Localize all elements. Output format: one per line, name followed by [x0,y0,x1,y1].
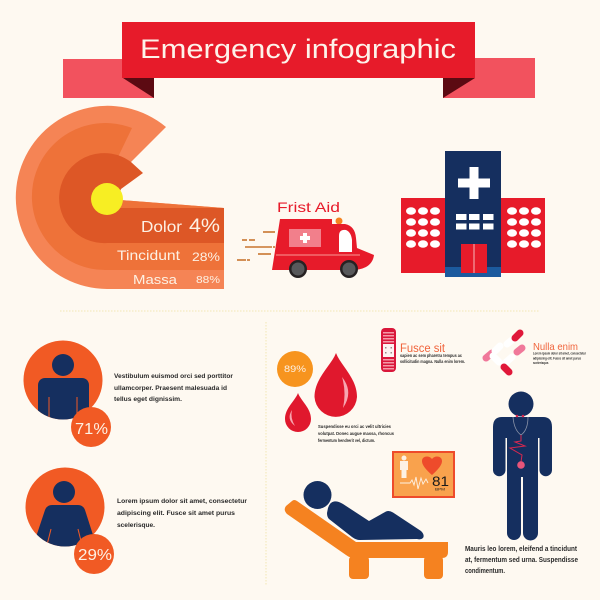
badge: 89%: 89% [284,364,307,375]
text block: Fusce sit: Fusce sit [400,343,446,355]
text block: Fusce sit [400,343,465,364]
icon: heart rate monitor: 81 [432,473,449,489]
concentric wedge chart: 28% [192,250,220,264]
icon: standing figure with stethoscope [493,392,552,541]
icon: heart rate monitor [393,452,454,497]
concentric wedge chart: Tincidunt [117,247,180,263]
text block: person 71%: tellus eget dignissim. [114,396,182,403]
text block: drops [318,424,394,444]
text block: Nulla enim: Lorem ipsum dolor sit amet, consectetur [533,352,587,356]
text block: person 29%: adipiscing elit. Fusce sit amet purus [117,510,235,517]
text block: person 71%: Vestibulum euismod orci sed porttitor [114,373,233,380]
badge: 89% [277,351,313,387]
text block: person 29%: Lorem ipsum dolor sit amet, consectetur [117,498,247,505]
concentric wedge chart: 88% [196,274,220,286]
icon: ambulance [237,218,374,278]
concentric wedge chart: Dolor [141,219,183,236]
text block: person 29% [117,498,247,529]
title: Emergency infographic [140,34,456,64]
icon: pills [486,333,522,372]
text block: Nulla enim: scelerisque. [533,361,549,365]
icon: patient on lounge [285,481,448,579]
text block: figure: at, fermentum sed urna. Suspendisse [465,557,578,564]
text block: figure: condimentum. [465,568,505,575]
icon: bandage [381,328,396,372]
panel: person stat 29%: 29% [78,547,112,564]
icon: blood drops [285,353,357,432]
concentric wedge chart: Massa [133,273,177,287]
ambulance label: Frist Aid [277,199,340,215]
panel: person stat 29% [26,468,114,574]
panel: person stat 71% [24,340,111,447]
text block: drops: volutpat. Donec augue massa, rhoncus [318,431,394,437]
title banner [63,22,535,98]
panel: person stat 71%: 71% [75,421,108,438]
text block: Nulla enim: Nulla enim [533,341,578,353]
text block: person 71% [114,373,233,403]
text block: figure: Mauris leo lorem, eleifend a tincidunt [465,546,578,553]
text block: person 71%: ullamcorper. Praesent malesuada id [114,385,227,392]
text block: Nulla enim: adipiscing elit. Fusce sit amet purus [533,356,581,360]
text block: Fusce sit: sollicitudin magna. Nulla enim lorem. [400,359,465,364]
icon: hospital [401,151,545,277]
text block: person 29%: scelerisque. [117,522,155,529]
concentric wedge chart [16,106,224,289]
text block: figure [465,546,578,575]
text block: drops: fermentum hendrerit vel, dictum. [318,438,375,444]
icon: heart rate monitor: BPM [435,488,445,492]
text block: Nulla enim [533,341,587,365]
concentric wedge chart: 4% [189,216,220,237]
text block: drops: Suspendisse eu orci ac velit ultricies [318,424,391,430]
text block: Fusce sit: sapien ac sem pharetra tempus ac [400,353,463,358]
